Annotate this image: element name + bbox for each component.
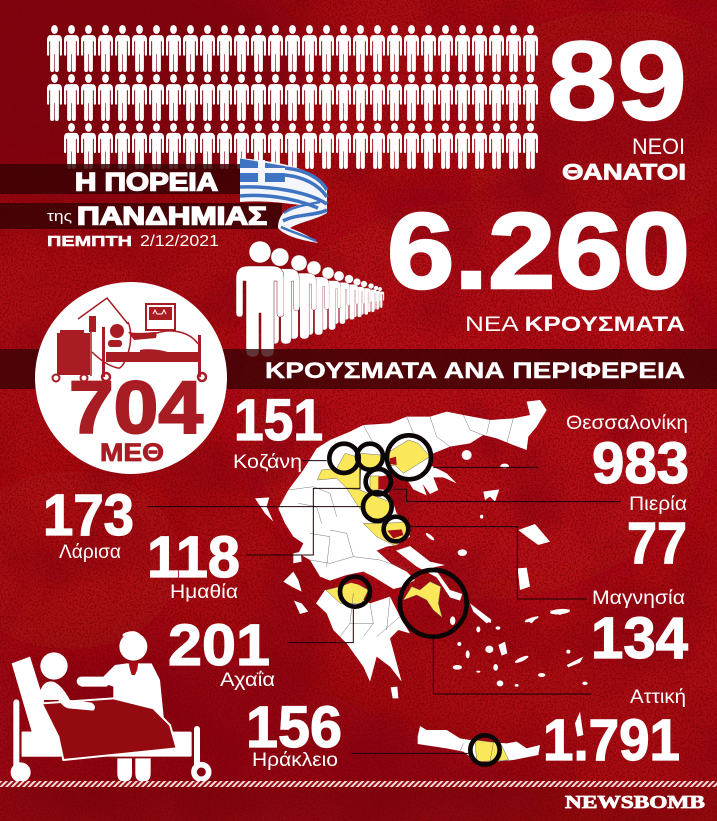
- title band: dark strips: [0, 164, 282, 229]
- section band: cases by region: [0, 349, 717, 389]
- ICU badge: ΜΕΘ: [100, 439, 164, 467]
- label: Larissa: Λάρισα: [59, 542, 121, 563]
- icon: greek flag ribbon: [240, 158, 327, 243]
- stat: 6.260 new cases: ΝΕΑ ΚΡΟΥΣΜΑΤΑ: [465, 313, 685, 336]
- label: Magnesia: Μαγνησία: [592, 588, 685, 609]
- label: Heraklion: Ηράκλειο: [252, 750, 338, 771]
- label: Thessaloniki: Θεσσαλονίκη: [566, 413, 688, 434]
- label: Attica: Αττική: [630, 687, 686, 708]
- people grid: 89 deaths: [47, 25, 538, 169]
- label: Achaia: Αχαΐα: [220, 670, 275, 691]
- stat: 89 new deaths: 89: [547, 18, 687, 144]
- label: Kozani: 151: [234, 388, 323, 453]
- title: της: [47, 208, 72, 225]
- bottom hatch strip: [0, 781, 717, 787]
- stat: 89 new deaths: ΘΑΝΑΤΟΙ: [562, 160, 686, 184]
- title: [47, 168, 267, 250]
- islands: [255, 450, 588, 737]
- title: ΠΕΜΠΤΗ: [47, 233, 132, 250]
- row 3 of people: [64, 123, 538, 169]
- label: Attica: 1.791: [543, 708, 680, 773]
- mainland: [278, 400, 547, 589]
- label: Magnesia: 134: [591, 606, 688, 671]
- label: Larissa: 173: [43, 483, 134, 548]
- stat: 89 new deaths: ΝΕΟΙ: [632, 134, 685, 159]
- ICU badge: [35, 282, 227, 474]
- Evia: [396, 546, 462, 601]
- highlighted regions: [317, 440, 509, 762]
- icon: ICU bed with monitor and machine: [52, 298, 206, 382]
- label: Thessaloniki: 983: [592, 431, 689, 496]
- icon: patient in bed with doctor: [11, 631, 209, 782]
- people queue: new cases: [236, 241, 384, 357]
- label: Kozani: Κοζάνη: [233, 452, 302, 473]
- label: Heraklion: 156: [246, 695, 342, 760]
- label: Pieria: Πιερία: [629, 494, 687, 515]
- leader lines: [148, 461, 620, 753]
- title: ΠΑΝΔΗΜΙΑΣ: [77, 202, 267, 230]
- stat: 6.260 new cases: 6.260: [387, 190, 690, 311]
- label: Achaia: 201: [168, 613, 270, 678]
- Peloponnese: [316, 589, 410, 682]
- row 2 of people: [47, 74, 538, 121]
- title: Η ΠΟΡΕΙΑ: [75, 168, 218, 196]
- region borders: [288, 415, 513, 762]
- red sea gaps: [347, 457, 403, 587]
- logo: NEWSBOMB: NEWSBOMB: [565, 792, 705, 812]
- row 1 of people: [47, 25, 538, 72]
- highlight circles: [329, 435, 500, 765]
- stat: 89 new deaths: [547, 18, 687, 184]
- ICU badge: 704: [69, 366, 203, 449]
- label: Pieria: 77: [627, 511, 687, 576]
- label: Imathia: Ημαθία: [170, 582, 238, 603]
- label: Imathia: 118: [147, 525, 240, 590]
- section band: cases by region: ΚΡΟΥΣΜΑΤΑ ΑΝΑ ΠΕΡΙΦΕΡΕΙΑ: [265, 358, 685, 383]
- map of Greece: [148, 400, 620, 765]
- title: 2/12/2021: [140, 233, 219, 250]
- Crete: [418, 726, 540, 762]
- label: Thessaloniki: [566, 413, 689, 496]
